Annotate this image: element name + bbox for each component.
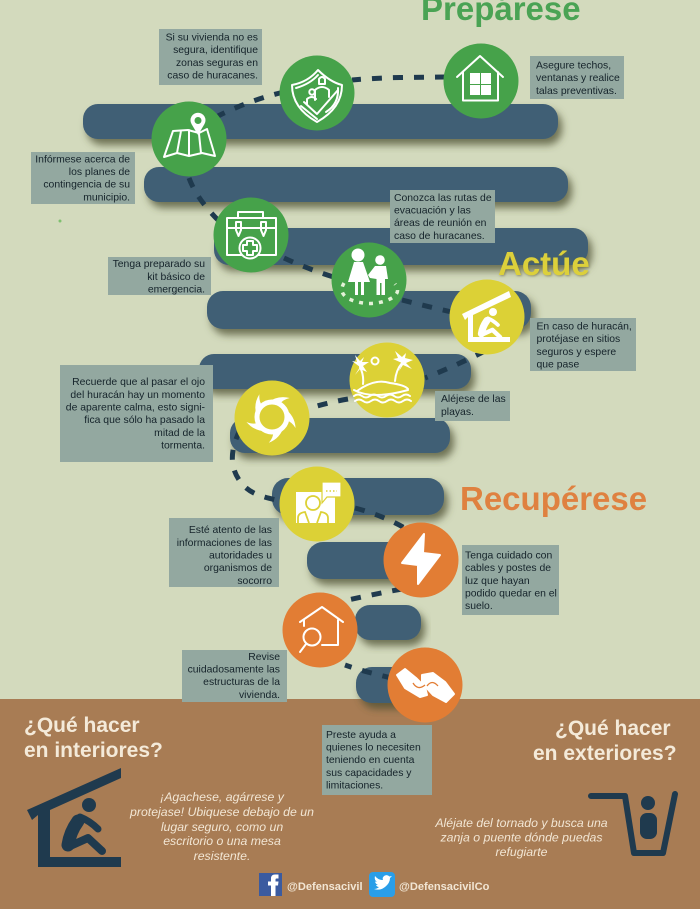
text: instrucciones exteriores: refugiarte	[496, 845, 548, 859]
text box: playas: Aléjese de las	[441, 394, 506, 405]
text box: zonas seguras	[159, 29, 262, 85]
text box: planes de contingencia: los planes de	[69, 167, 130, 178]
heading: interiores: en interiores?	[24, 739, 163, 762]
heading: exteriores: ¿Qué hacer	[555, 717, 671, 740]
text box: preste ayuda: sus capacidades y	[326, 768, 412, 779]
text box: rutas de evacuación	[390, 190, 495, 243]
text box: kit básico: emergencia.	[148, 284, 205, 296]
icon: first aid kit	[214, 198, 288, 272]
text box: informaciones de autoridades: socorro	[237, 576, 272, 587]
text: instrucciones exteriores: Aléjate del tornado y busca una	[434, 816, 608, 830]
text box: sitios seguros: seguros y espere	[536, 347, 616, 358]
heading: exteriores: en exteriores?	[533, 742, 677, 765]
text box: informaciones de autoridades: autoridades u	[209, 550, 272, 562]
text box: playas: playas.	[441, 407, 474, 418]
text box: preste ayuda: limitaciones.	[326, 780, 383, 792]
text box: zonas seguras: segura, identifique	[173, 45, 258, 56]
icon: lightning bolt	[384, 522, 458, 598]
text box: informaciones de autoridades: informaciones de las	[177, 538, 272, 549]
icon: person under shelter	[27, 768, 121, 867]
text box: sitios seguros	[530, 318, 636, 371]
text box: informaciones de autoridades	[169, 518, 279, 587]
icon: island with palm trees	[350, 342, 424, 418]
text box: estructuras de la vivienda: vivienda.	[239, 690, 280, 701]
text box: techos y ventanas: ventanas y realice	[536, 73, 620, 84]
text box: cables y postes: cables y postes de	[465, 563, 551, 574]
icon: map with pin	[152, 102, 226, 176]
text box: rutas de evacuación: Conozca las rutas de	[394, 193, 492, 204]
text box: planes de contingencia: Infórmese acerca de	[35, 154, 130, 166]
text box: estructuras de la vivienda	[182, 650, 287, 702]
social: Twitter	[369, 872, 490, 897]
text box: cables y postes: Tenga cuidado con	[465, 550, 552, 562]
text box: informaciones de autoridades: organismos de	[204, 563, 272, 574]
staircase bars	[83, 104, 588, 703]
text: instrucciones interiores: resistente.	[194, 849, 250, 863]
icon: house inspection	[282, 592, 358, 668]
text box: techos y ventanas: Asegure techos,	[536, 60, 611, 72]
small green dot	[58, 220, 62, 222]
text box: planes de contingencia: contingencia de su	[43, 180, 130, 191]
text box: zonas seguras: Si su vivienda no es	[166, 32, 258, 44]
icon: shelter	[450, 280, 524, 354]
text box: informaciones de autoridades: Esté atento de las	[189, 525, 272, 536]
text box: ojo del huracán: de aparente calma, esto signi-	[66, 402, 205, 414]
text box: zonas seguras: caso de huracanes.	[167, 70, 258, 82]
text box: estructuras de la vivienda: Revise	[248, 652, 280, 663]
text box: preste ayuda: Preste ayuda a	[326, 730, 396, 741]
text box: preste ayuda: quienes lo necesiten	[326, 742, 421, 754]
text box: cables y postes: luz que hayan	[465, 576, 530, 587]
text: instrucciones interiores: escritorio o una mesa	[163, 834, 281, 848]
text box: cables y postes: suelo.	[465, 601, 493, 612]
text box: rutas de evacuación: áreas de reunión en	[394, 218, 487, 229]
text box: rutas de evacuación: caso de huracanes.	[394, 231, 485, 242]
icon: shield with family	[280, 56, 354, 130]
text box: rutas de evacuación: evacuación y las	[394, 206, 471, 216]
icon: person with speech bubble	[280, 466, 354, 542]
text: instrucciones exteriores: zanja o puente dónde puedas	[439, 830, 603, 844]
text box: sitios seguros: En caso de huracán,	[536, 322, 632, 332]
icon: person in ditch	[591, 794, 675, 853]
icon: house	[444, 44, 518, 118]
text: instrucciones interiores: lugar seguro, como un	[161, 820, 283, 834]
text box: preste ayuda	[322, 725, 432, 795]
heading: Actúe: Actúe	[498, 245, 590, 282]
dashed route	[189, 77, 485, 678]
text box: kit básico	[108, 257, 211, 296]
text box: techos y ventanas: talas preventivas.	[536, 86, 617, 97]
brown bottom panel	[0, 699, 700, 909]
heading: interiores: ¿Qué hacer	[24, 714, 140, 737]
text box: estructuras de la vivienda: cuidadosamente las	[188, 664, 280, 676]
text box: estructuras de la vivienda: estructuras de la	[203, 677, 280, 688]
text box: ojo del huracán: Recuerde que al pasar el ojo	[72, 377, 205, 388]
text box: planes de contingencia: municipio.	[83, 192, 130, 204]
text box: planes de contingencia	[31, 152, 135, 204]
text box: ojo del huracán: del huracán hay un momento	[70, 390, 205, 401]
text: instrucciones interiores: ¡Agachese, agárrese y	[160, 790, 285, 804]
text box: ojo del huracán: fica que sólo ha pasado la	[84, 415, 205, 426]
icon: helping hands	[388, 648, 462, 722]
text box: sitios seguros: protéjase en sitios	[536, 334, 620, 345]
social: Twitter: @DefensacivilCo	[399, 881, 490, 893]
text box: ojo del huracán: mitad de la	[154, 428, 205, 439]
text box: playas	[435, 391, 510, 421]
icon: family on safe ground	[332, 242, 406, 318]
text box: ojo del huracán: tormenta.	[161, 440, 205, 452]
icon: hurricane eye	[234, 380, 310, 456]
text box: ojo del huracán	[60, 365, 213, 462]
text box: zonas seguras: zonas seguras en	[176, 58, 258, 69]
text box: techos y ventanas	[530, 56, 624, 99]
text box: cables y postes: podido quedar en el	[465, 588, 557, 600]
text box: kit básico: Tenga preparado su	[113, 259, 205, 270]
social: Facebook	[259, 873, 363, 896]
text box: sitios seguros: que pase	[536, 360, 579, 370]
text box: kit básico: kit básico de	[147, 272, 205, 283]
social: Facebook: @Defensacivil	[287, 881, 363, 893]
text box: preste ayuda: teniendo en cuenta	[326, 755, 415, 766]
text: instrucciones interiores: protejase! Ubiquese debajo de un	[129, 805, 314, 819]
heading: Recupérese: Recupérese	[460, 480, 647, 517]
text box: cables y postes	[462, 545, 559, 615]
